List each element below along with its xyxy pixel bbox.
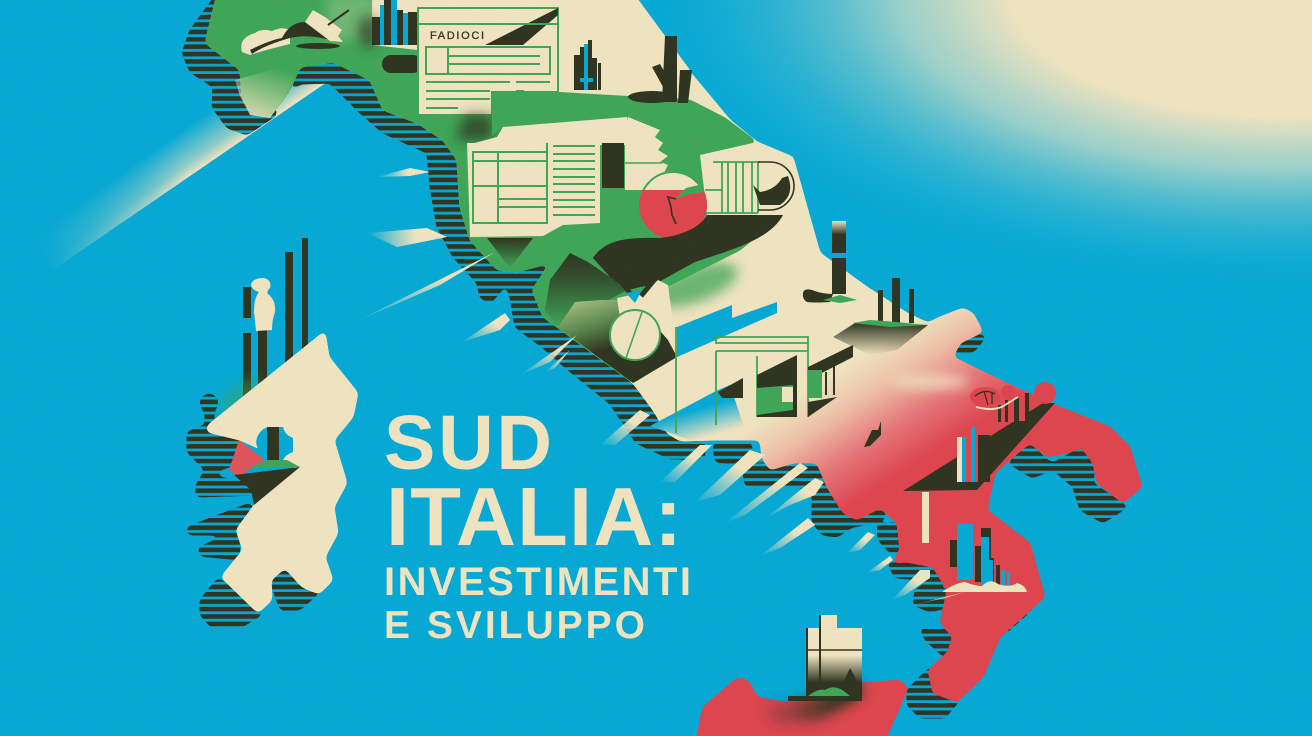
dark pill icon [382,55,422,73]
green mound [823,295,857,303]
plant base [628,91,676,103]
bar chart on shelf [957,427,990,482]
dark shadow by the bars [358,16,378,48]
blue bars [580,44,593,90]
dark shadow band [593,215,783,290]
subtitle line E SVILUPPO: E SVILUPPO [384,604,645,647]
striped coastline shadow [182,0,1126,718]
window [782,387,793,402]
table frame [473,152,547,223]
red blobs icons [970,382,1056,409]
crack [668,197,676,224]
dark bar [372,17,380,45]
cream light ray [52,84,325,268]
left blob glyph [975,391,995,405]
dark center [757,355,797,417]
dark bar [384,0,391,45]
dark bars [574,40,601,90]
streak [892,570,930,600]
blue bar [403,13,408,45]
ragged cream panel [625,117,668,190]
title line SUD: SUD [384,400,552,486]
streak [462,313,510,342]
bar [285,252,293,367]
green mound [808,687,850,696]
lower blue band [650,385,745,440]
circle gauge with scissors [610,273,660,360]
dark bar [981,528,991,583]
bar [878,290,883,323]
land base cream to red [206,0,1142,736]
red wedge [229,440,265,477]
dark floor [808,397,837,417]
dark bar [978,435,990,482]
paper [467,143,600,237]
shadow below table [487,238,533,268]
dark bars [998,393,1029,422]
person figure [251,278,275,331]
icon: dark plant top right of form [628,36,692,103]
blue bar [957,524,973,580]
scissor arm [615,274,630,293]
small bar chart on shelf [998,393,1029,422]
streak [760,518,815,556]
cream pin [305,10,343,42]
bar [892,278,900,323]
cream bar [922,492,929,543]
streak [600,410,650,445]
center blob [1001,385,1015,399]
streak [847,532,875,553]
subtitle line INVESTIMENTI: INVESTIMENTI [384,560,691,604]
title line ITALIA: ITALIA: [386,470,682,563]
plant stem [678,70,692,103]
streak [355,252,495,322]
document panel: table [467,117,668,237]
green outline [676,327,808,433]
green mound [853,320,928,327]
title [384,400,691,647]
pale green lobe [235,62,300,118]
cream bar [957,437,962,482]
dark bar [950,540,957,567]
form box lines [448,56,540,64]
blue bar [391,0,397,45]
cream hillock [617,280,675,335]
bar [243,287,251,318]
bar [909,289,914,323]
bar [243,333,251,398]
green fade on cream [647,254,743,316]
blue bar [971,427,975,482]
circle red bottom [639,190,707,238]
red bars [1001,396,1025,422]
chimneys bar chart [833,278,928,355]
green right [808,370,822,398]
left blob [970,387,1000,407]
plant leaf [652,64,676,96]
island shape [207,331,358,613]
Sardinia [207,238,358,613]
document bottom shadow [455,115,492,140]
streak [867,556,893,573]
dark leaf icon [864,421,881,447]
blue bar [981,537,989,585]
dark diagonal [485,8,558,45]
dark mountain shading [545,253,627,327]
small bar chart [574,40,601,90]
vertical line [807,615,820,696]
streak [766,478,824,518]
body [807,628,862,696]
dark left wall [718,378,743,398]
tower icon [803,221,857,303]
mountain gradient region [558,300,677,383]
pin needle [328,10,349,25]
cream curve [976,397,1018,409]
mainland Italy [206,0,1142,736]
document paper [418,8,558,115]
dark bar [996,565,1000,585]
streak [520,335,577,375]
capsule dark fill [753,176,790,205]
needle [626,312,642,358]
green wedge [675,184,704,199]
document panel: FADIOCI form [418,8,558,115]
blue bar [989,560,993,585]
dark shadow ellipse [296,43,340,49]
header line [418,23,558,25]
right blob [1034,382,1056,404]
bar chart top [372,0,418,45]
cloud bumps [241,28,290,55]
dark foot [803,289,833,302]
dark smear [250,22,337,54]
circle [610,310,660,360]
side lines [553,146,595,215]
bar chart Calabria [942,524,1027,592]
list lines [426,82,550,108]
blue bar [380,5,384,45]
blue hole [256,427,293,460]
streaks [355,168,965,605]
Sicily shadow [757,683,862,725]
cream mound [942,581,1027,592]
green interior [757,385,793,415]
dark roof right [808,345,853,380]
streak [660,445,712,482]
posts [826,365,834,395]
circle top cream [640,172,706,238]
blue funnel [626,290,642,303]
tall section [819,615,837,630]
streak [367,228,447,247]
cream panel line [625,162,662,164]
bars above Sardinia [243,238,308,398]
green top [248,460,300,468]
building on Sicily [788,615,862,701]
bar [302,238,308,353]
blue ribbon [677,302,777,357]
table outline [473,143,595,223]
green fade top band [327,0,377,40]
form box divider [447,47,449,74]
building panel [676,327,853,433]
cream back [700,142,800,215]
horizontal line [807,649,862,651]
dark chart shelf [903,403,1055,491]
streak [725,463,808,523]
capsule panel [700,142,800,215]
red bar [966,436,971,482]
sunlight glow top right [600,0,1312,320]
bar [258,330,267,390]
streak [545,350,570,372]
blue bar [1001,570,1005,586]
document title: FADIOCI [430,30,484,42]
cream strip above [467,117,627,145]
red bar [975,436,978,482]
scissor arm [641,273,660,296]
dark bar [397,10,403,45]
green band under document [492,92,628,136]
green glow [214,373,266,417]
blue bar [962,437,966,482]
vertical lines [705,162,760,213]
dark bar [989,558,994,585]
dark bar [975,546,983,582]
capsule outline [758,162,794,210]
blue bar [1007,572,1010,586]
white highlight on land [890,375,970,389]
icon: pin and cloud top left [241,10,349,55]
streak [695,450,765,502]
plant stems [662,36,677,102]
form box [426,47,550,74]
dark wedge [234,467,300,505]
dark block [602,143,624,188]
wedge shadow [833,323,928,355]
top cream block [372,0,690,96]
green northern region [205,0,785,383]
dark bar [408,12,418,45]
right shadow [837,668,862,696]
table grid [473,143,547,223]
pie chart circle [639,171,707,239]
tower body [832,258,846,294]
streak [377,168,430,177]
tower top [832,221,846,253]
streak [913,592,965,605]
dark base [788,696,862,701]
dark bar [267,427,279,461]
